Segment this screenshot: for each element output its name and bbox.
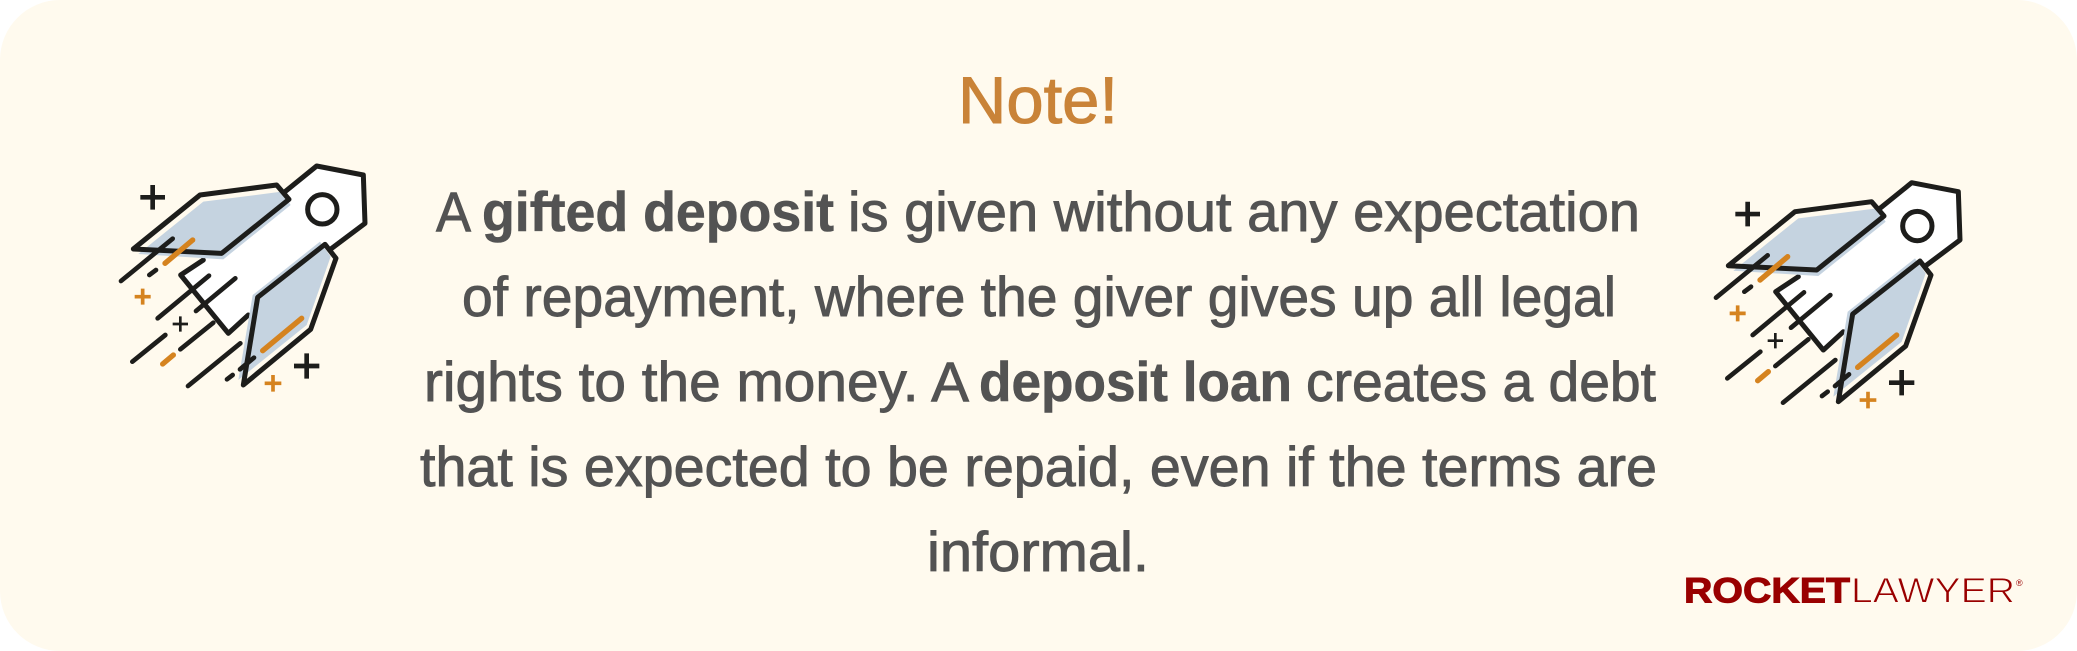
text block: note body: is given without any expectation	[848, 180, 1640, 243]
text block: note body: of repayment, where the giver gives up all legal	[462, 265, 1616, 328]
logo: Rocket Lawyer: ®	[2016, 578, 2023, 588]
text block: note body: gifted deposit	[482, 180, 834, 243]
text block: note body: informal.	[927, 520, 1149, 583]
text block: note body: A	[436, 180, 472, 243]
text block: note body: rights to the money. A	[424, 350, 970, 413]
text block: note body: creates a debt	[1306, 350, 1656, 413]
text block: note body: deposit loan	[979, 350, 1292, 413]
title: Note!: Note!	[958, 63, 1118, 137]
logo: Rocket Lawyer: LAWYER	[1851, 572, 2015, 610]
icon: rocket left	[121, 166, 365, 392]
logo: Rocket Lawyer	[1684, 572, 2023, 610]
logo: Rocket Lawyer: ROCKET	[1684, 572, 1850, 610]
text block: note body: that is expected to be repaid, even if the terms are	[420, 435, 1657, 498]
text block: note body	[420, 180, 1657, 583]
icon: rocket right	[1716, 183, 1960, 408]
